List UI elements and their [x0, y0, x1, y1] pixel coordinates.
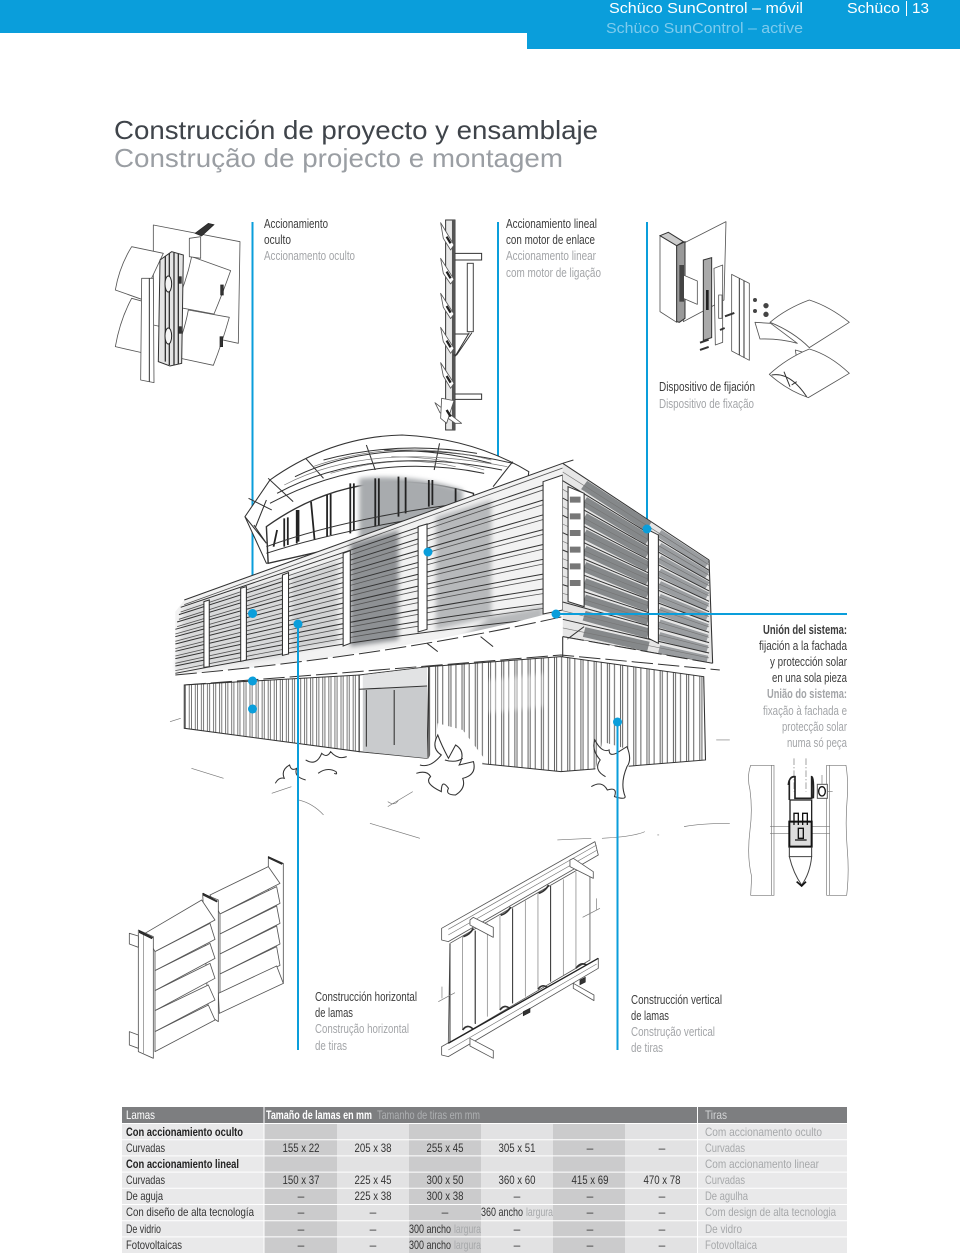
label: vertical louvres: Construção vertical [631, 1025, 715, 1039]
header band [0, 0, 960, 49]
table header: Tamaño de lamas en mm [266, 1108, 372, 1122]
shrubs [416, 723, 484, 797]
table header [126, 1108, 727, 1122]
label: horizontal louvres: Construção horizontal [315, 1022, 409, 1036]
label: fixing device: Dispositivo de fijación [659, 380, 755, 394]
table column: Portuguese row names: Com accionamento oculto [705, 1125, 822, 1139]
table values: 150 x 37 [282, 1173, 320, 1187]
label: system joint [759, 623, 847, 750]
label: concealed drive [264, 217, 355, 263]
table values: – [370, 1205, 377, 1219]
table values: 360 ancho [481, 1205, 523, 1219]
illustration: linear motor mast [435, 220, 482, 430]
table column: Portuguese row names: Curvadas [705, 1173, 745, 1187]
table values: – [659, 1238, 666, 1252]
table values: – [514, 1238, 521, 1252]
illustration: vertical louvre assembly [438, 842, 600, 1058]
table values: – [659, 1222, 666, 1236]
table values: – [587, 1205, 594, 1219]
header title: Schüco SunControl – active [606, 20, 803, 37]
title [114, 115, 598, 173]
table backgrounds [122, 1107, 847, 1253]
table column: Portuguese row names: Fotovoltaica [705, 1238, 757, 1252]
table values: largura [454, 1238, 481, 1252]
label: system joint: União do sistema: [767, 687, 847, 701]
connector line: vertical louvres [616, 722, 618, 1050]
table column: Spanish row names: Curvadas [126, 1141, 165, 1155]
label: vertical louvres: de tiras [631, 1041, 663, 1055]
connector line: linear motor [428, 222, 498, 552]
table values: – [442, 1205, 449, 1219]
header title [606, 0, 803, 37]
connector dots [248, 524, 652, 726]
table values: largura [454, 1222, 481, 1236]
label: linear motor: con motor de enlace [506, 233, 595, 247]
table values: – [370, 1222, 377, 1236]
label: horizontal louvres: de tiras [315, 1039, 347, 1053]
right facade louvres [563, 463, 713, 663]
table column: Portuguese row names: De agulha [705, 1189, 748, 1203]
label: horizontal louvres: de lamas [315, 1006, 353, 1020]
left facade louvres [175, 463, 563, 675]
table column: Spanish row names: De vidrio [126, 1222, 161, 1236]
table values: – [659, 1205, 666, 1219]
label: linear motor: com motor de ligação [506, 266, 601, 280]
illustration: concealed drive louvre [115, 223, 240, 383]
table header: Tiras [705, 1108, 727, 1122]
table values: largura [526, 1205, 553, 1219]
table column: Spanish row names: Curvadas [126, 1173, 165, 1187]
label: system joint: fijación a la fachada [759, 639, 847, 653]
label: concealed drive: Accionamento oculto [264, 249, 355, 263]
label: linear motor [506, 217, 601, 280]
dome roof [245, 435, 529, 563]
label: vertical louvres [631, 993, 722, 1055]
illustration: system joint section [748, 758, 848, 895]
label: fixing device [659, 380, 755, 411]
table header: Tamanho de tiras em mm [377, 1108, 480, 1122]
page number: 13 [912, 0, 929, 17]
table values: – [370, 1238, 377, 1252]
table header: Lamas [126, 1108, 155, 1122]
building sketch [170, 435, 730, 840]
label: system joint: Unión del sistema: [763, 623, 847, 637]
table column: Portuguese row names: De vidro [705, 1222, 742, 1236]
table values: 360 x 60 [498, 1173, 536, 1187]
table values: – [298, 1205, 305, 1219]
table column: Spanish row names: De aguja [126, 1189, 163, 1203]
table values: 255 x 45 [426, 1141, 464, 1155]
table values: 300 x 38 [426, 1189, 464, 1203]
label: system joint: y protección solar [770, 655, 847, 669]
connector line: horizontal louvres [297, 624, 299, 1050]
table column: Portuguese row names [705, 1125, 836, 1252]
table values: – [659, 1189, 666, 1203]
label: linear motor: Accionamiento lineal [506, 217, 597, 231]
table values: 305 x 51 [498, 1141, 536, 1155]
label: concealed drive: oculto [264, 233, 291, 247]
table column: Spanish row names: Con accionamiento lineal [126, 1157, 239, 1171]
drum [266, 482, 473, 563]
page number [847, 0, 929, 17]
label: linear motor: Accionamento linear [506, 249, 596, 263]
table values: 470 x 78 [644, 1173, 681, 1187]
table values: – [514, 1222, 521, 1236]
canopy slab [175, 615, 720, 685]
table values: – [587, 1238, 594, 1252]
title: Construção de projecto e montagem [114, 143, 563, 173]
connector line: system joint [556, 613, 847, 615]
page number: Schüco [847, 0, 900, 17]
left facade brackets [204, 475, 563, 667]
label: concealed drive: Accionamiento [264, 217, 328, 231]
label: fixing device: Dispositivo de fixação [659, 397, 754, 411]
connector line: concealed drive [252, 222, 254, 709]
table values: – [514, 1189, 521, 1203]
label: system joint: fixação à fachada e [763, 704, 847, 718]
table values: – [298, 1222, 305, 1236]
lower block [184, 675, 359, 752]
table column: Spanish row names: Con diseño de alta tecnología [126, 1205, 254, 1219]
title: Construcción de proyecto y ensamblaje [114, 115, 598, 145]
right facade brackets [568, 487, 658, 643]
label: horizontal louvres: Construcción horizontal [315, 990, 417, 1004]
table values: 205 x 38 [354, 1141, 392, 1155]
label: vertical louvres: Construcción vertical [631, 993, 722, 1007]
table values: 225 x 38 [354, 1189, 392, 1203]
label: system joint: protecção solar [782, 720, 847, 734]
label: system joint: numa só peça [787, 736, 847, 750]
table column: Portuguese row names: Curvadas [705, 1141, 745, 1155]
table values: 415 x 69 [572, 1173, 609, 1187]
table values: 225 x 45 [354, 1173, 392, 1187]
table values: – [587, 1141, 594, 1155]
label: vertical louvres: de lamas [631, 1009, 669, 1023]
table column: Spanish row names [126, 1125, 254, 1252]
table values: – [587, 1222, 594, 1236]
table column: Spanish row names: Fotovoltaicas [126, 1238, 182, 1252]
table column: Portuguese row names: Com accionamento linear [705, 1157, 819, 1171]
table values: – [587, 1189, 594, 1203]
table values: – [298, 1189, 305, 1203]
table column: Portuguese row names: Com design de alta tecnologia [705, 1205, 836, 1219]
table values: 300 ancho [409, 1222, 451, 1236]
illustration: horizontal louvre assembly [129, 857, 283, 1058]
connector line: fixing device [646, 222, 648, 529]
table values: 300 x 50 [426, 1173, 464, 1187]
label: horizontal louvres [315, 990, 417, 1053]
table values [282, 1141, 681, 1252]
table values: 300 ancho [409, 1238, 451, 1252]
header title: Schüco SunControl – móvil [609, 0, 803, 17]
ground strokes [170, 718, 730, 840]
illustration: fixing device exploded view [660, 222, 849, 398]
label: system joint: en una sola pieza [772, 671, 847, 685]
table values: 155 x 22 [282, 1141, 320, 1155]
table values: – [298, 1238, 305, 1252]
table column: Spanish row names: Con accionamiento oculto [126, 1125, 243, 1139]
table: louvre sizes [122, 1107, 847, 1253]
table values: – [659, 1141, 666, 1155]
